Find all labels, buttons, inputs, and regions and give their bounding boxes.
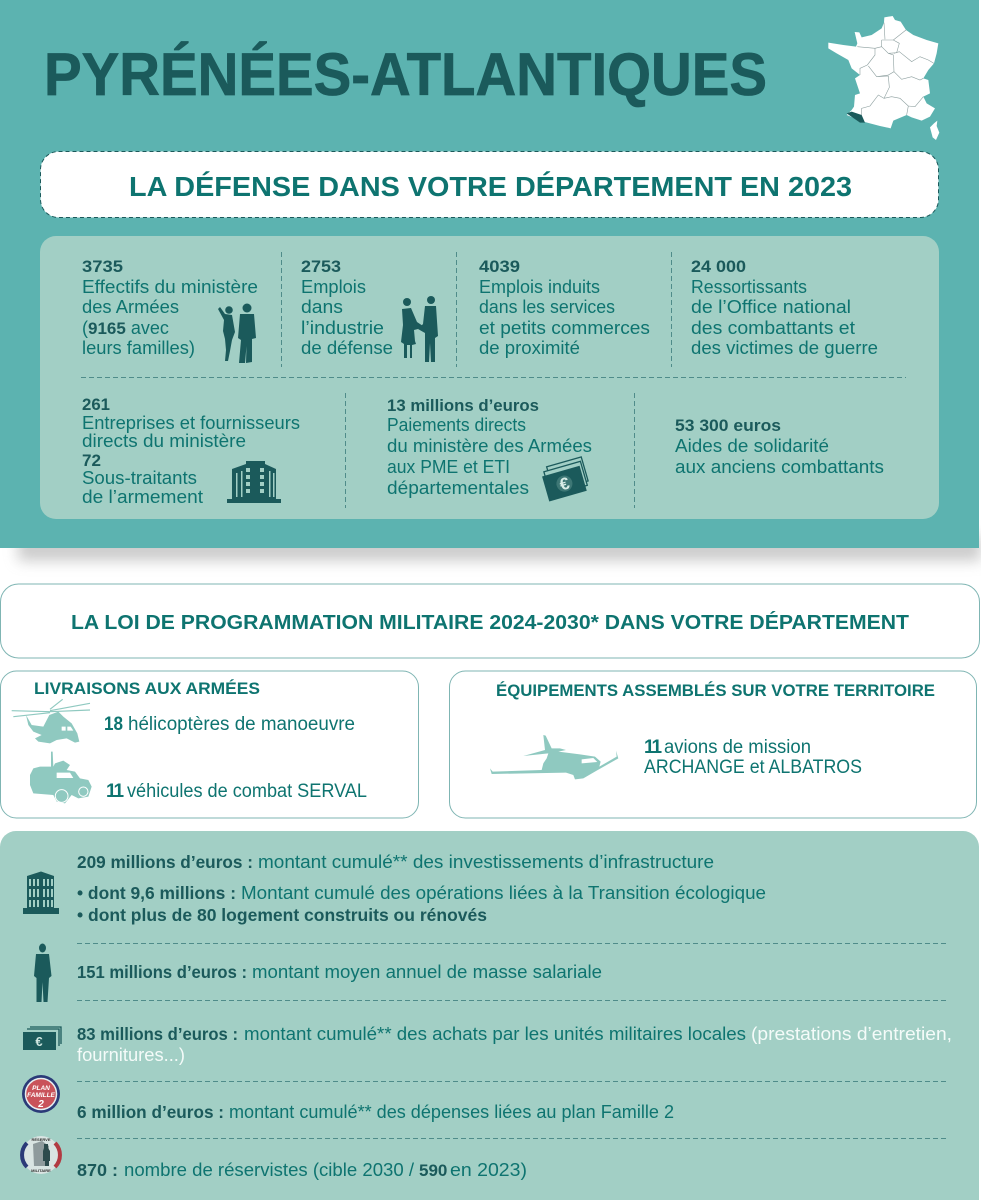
icon: plan famille badge: 2 — [37, 1099, 44, 1110]
stat: emplois induits: dans les services — [479, 297, 615, 317]
icon: réserve militaire badge: RÉSERVE — [31, 1137, 51, 1142]
stat: effectifs: (9165 avec — [82, 318, 169, 338]
text: hélicoptères: hélicoptères de manoeuvre — [128, 714, 355, 735]
stat: emplois induits — [479, 257, 650, 358]
stat: entreprises — [82, 395, 300, 507]
text: avions: ARCHANGE et ALBATROS — [644, 757, 862, 778]
icon: réserve militaire badge: MILITAIRE — [31, 1168, 51, 1173]
icon: plan famille badge: PLAN — [32, 1085, 50, 1092]
icon: handshake — [401, 296, 438, 362]
stat: aides: 53 300 euros — [675, 416, 781, 435]
icon: helicopter — [12, 699, 90, 743]
icon: building — [227, 461, 281, 503]
stat: paiements — [387, 396, 592, 498]
stat: emplois industrie: 2753 — [301, 257, 341, 276]
text: infrastructure: 209 millions d’euros : — [77, 852, 253, 872]
text: masse salariale: 151 millions d’euros : — [77, 962, 247, 982]
stat: entreprises: Entreprises et fournisseurs — [82, 413, 300, 433]
LPM heading: LA LOI DE PROGRAMMATION MILITAIRE 2024-2030* DANS VOTRE DÉPARTEMENT — [71, 611, 909, 634]
text: masse salariale — [77, 962, 602, 982]
stat: emplois induits: et petits commerces — [479, 318, 650, 338]
stat: entreprises: Sous-traitants — [82, 468, 197, 488]
text: avions: avions de mission — [664, 737, 811, 758]
stat: paiements: 13 millions d’euros — [387, 396, 539, 415]
header shadow — [18, 535, 981, 561]
text: infrastructure: montant cumulé** des investissements d’infrastructure — [258, 852, 714, 872]
stat: entreprises: de l’armement — [82, 487, 203, 507]
text: achats: (prestations d’entretien, — [751, 1024, 952, 1044]
stat: emplois industrie: de défense — [301, 338, 393, 358]
panel: livraisons — [0, 671, 418, 818]
stat: emplois industrie: l’industrie — [301, 318, 384, 338]
stat: aides: Aides de solidarité — [675, 436, 829, 456]
stat: paiements: départementales — [387, 478, 529, 498]
text: infrastructure: • dont plus de 80 logement construits ou rénovés — [77, 905, 487, 925]
stat: ressortissants: de l’Office national — [691, 297, 851, 317]
text: achats — [77, 1024, 952, 1065]
text: masse salariale: montant moyen annuel de masse salariale — [252, 962, 602, 982]
stat: paiements: du ministère des Armées — [387, 436, 592, 456]
icon: map of France — [828, 16, 939, 140]
text: avions: 11 — [644, 737, 663, 758]
stat: entreprises: 261 — [82, 395, 110, 414]
text: plan famille: montant cumulé** des dépenses liées au plan Famille 2 — [229, 1102, 674, 1122]
stat: ressortissants: des combattants et — [691, 318, 855, 338]
title: PYRÉNÉES-ATLANTIQUES — [44, 41, 767, 108]
text: hélicoptères: 18 — [104, 714, 123, 735]
icon: aircraft — [490, 735, 618, 779]
stat: effectifs: Effectifs du ministère — [82, 277, 258, 297]
banner heading: LA DÉFENSE DANS VOTRE DÉPARTEMENT EN 2023 — [129, 171, 852, 202]
text: avions — [644, 737, 862, 778]
text: véhicules: 11 — [106, 781, 125, 802]
stat: paiements: aux PME et ETI — [387, 457, 510, 477]
stat: emplois industrie: dans — [301, 297, 343, 317]
text: réservistes — [77, 1160, 527, 1180]
stat: emplois industrie: Emplois — [301, 277, 366, 297]
banner: la défense — [40, 152, 938, 218]
stat: aides: aux anciens combattants — [675, 457, 884, 477]
icon: banknotes — [540, 457, 591, 501]
icon: soldiers — [218, 304, 256, 363]
stat: aides — [675, 416, 884, 477]
text: réservistes: en 2023) — [450, 1160, 527, 1180]
panel: department header — [0, 0, 979, 548]
text: plan famille: 6 million d’euros : — [77, 1102, 224, 1122]
stat: entreprises: directs du ministère — [82, 431, 246, 451]
icon: plan famille badge — [22, 1075, 60, 1113]
text: achats: 83 millions d’euros : — [77, 1024, 238, 1044]
banner: LPM — [0, 584, 980, 658]
icon: réserve militaire badge — [22, 1136, 60, 1174]
text: véhicules: véhicules de combat SERVAL — [127, 781, 367, 802]
heading: équipements: ÉQUIPEMENTS ASSEMBLÉS SUR VOTRE TERRITOIRE — [496, 681, 935, 700]
text: réservistes: 870 : — [77, 1160, 118, 1180]
stat: entreprises: 72 — [82, 451, 101, 470]
icon: banknotes: € — [557, 473, 572, 494]
panel: key figures — [40, 236, 939, 519]
stat: ressortissants: des victimes de guerre — [691, 338, 878, 358]
text: infrastructure: • dont 9,6 millions : — [77, 883, 236, 903]
stat: effectifs: des Armées — [82, 297, 179, 317]
stat: ressortissants — [691, 257, 878, 358]
icon: banknotes: € — [35, 1034, 43, 1049]
stat: emplois induits: Emplois induits — [479, 277, 600, 297]
stat: ressortissants: 24 000 — [691, 257, 746, 276]
stat: emplois industrie — [301, 257, 393, 358]
text: infrastructure — [77, 852, 766, 925]
text: achats: montant cumulé** des achats par les unités militaires locales — [244, 1024, 746, 1044]
panel: investissements — [0, 831, 979, 1200]
stat: effectifs: 3735 — [82, 257, 123, 276]
icon: serval vehicle — [30, 752, 92, 803]
stat: effectifs: leurs familles) — [82, 338, 195, 358]
heading: livraisons: LIVRAISONS AUX ARMÉES — [34, 679, 260, 698]
text: achats: fournitures...) — [77, 1045, 185, 1065]
stat: emplois induits: de proximité — [479, 338, 580, 358]
icon: person — [34, 944, 52, 1002]
stat: paiements: Paiements directs — [387, 415, 526, 435]
panel: équipements — [450, 671, 976, 818]
icon: banknotes — [23, 1027, 61, 1050]
text: infrastructure: Montant cumulé des opérations liées à la Transition écologique — [241, 883, 766, 903]
stat: ressortissants: Ressortissants — [691, 277, 807, 297]
stat: effectifs — [82, 257, 258, 358]
stat: emplois induits: 4039 — [479, 257, 520, 276]
icon: building — [23, 872, 59, 914]
icon: plan famille badge: FAMILLE — [27, 1092, 56, 1099]
text: réservistes: 590 — [419, 1161, 447, 1180]
text: réservistes: nombre de réservistes (cible 2030 / — [124, 1160, 414, 1180]
